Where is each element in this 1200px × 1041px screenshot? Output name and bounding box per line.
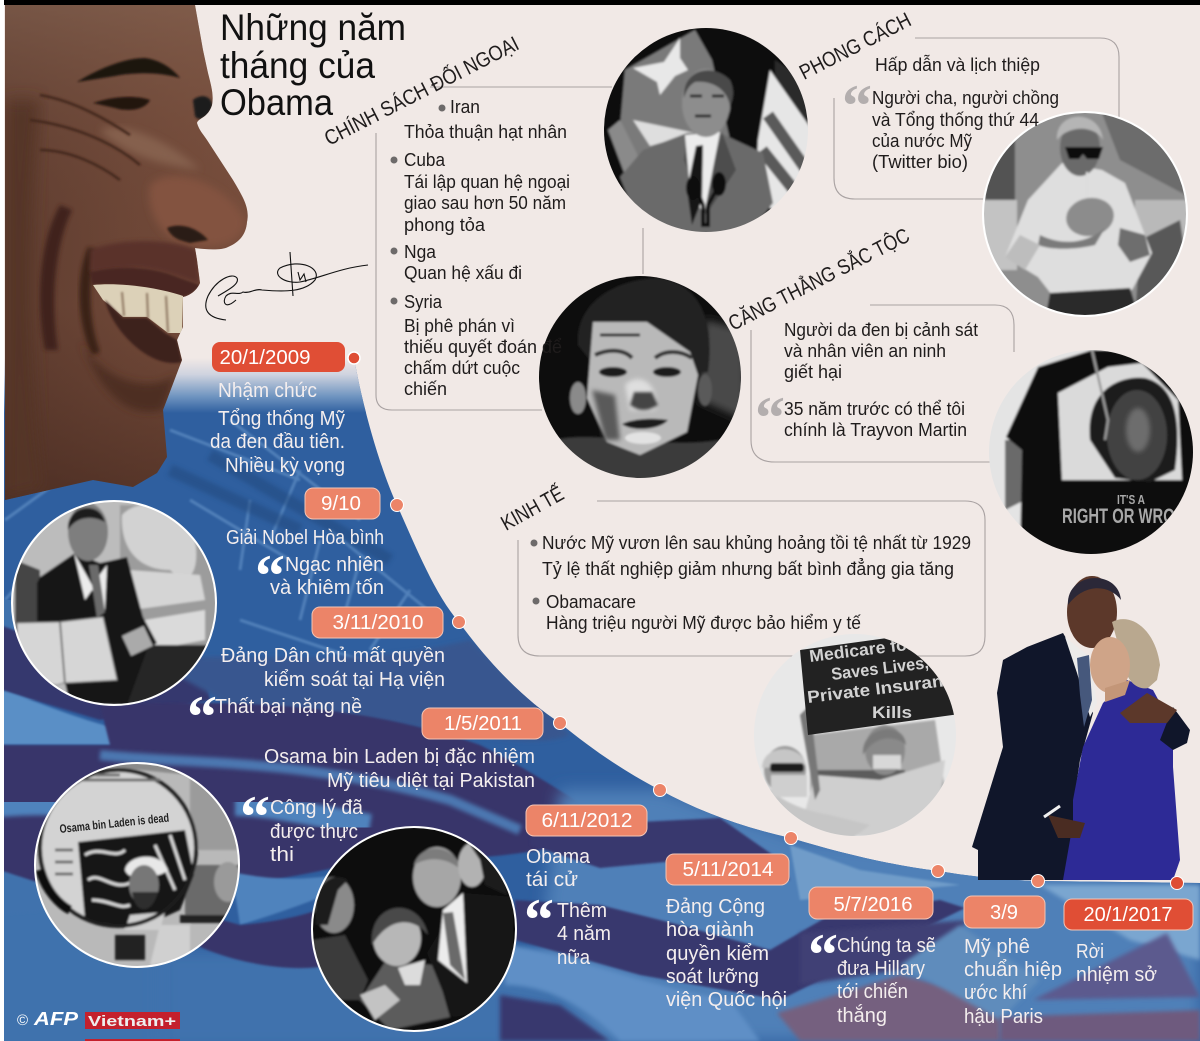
timeline item: 6/11/2012: [524, 784, 666, 969]
text block: foreign policy: giao sau hơn 50 năm: [404, 193, 566, 213]
timeline item: 3/9: ước khí: [964, 982, 1027, 1004]
timeline item: 3/9: 3/9: [990, 902, 1018, 924]
timeline item: 6/11/2012: Obama: [526, 846, 591, 868]
title: Những năm: [220, 7, 406, 48]
text block: economy: Hàng triệu người Mỹ được bảo hiểm y tế: [546, 613, 861, 633]
timeline item: 20/1/2009: da đen đầu tiên.: [210, 431, 345, 453]
heading: economy: KINH TẾ: [497, 482, 568, 535]
credits: AFP and Vietnam+: AFP: [33, 1009, 79, 1029]
timeline item: 6/11/2012: tái cử: [526, 869, 578, 891]
quote mark: “: [808, 922, 838, 988]
timeline item: 6/11/2012: 6/11/2012: [542, 810, 632, 832]
timeline item: 20/1/2009: Tổng thống Mỹ: [218, 408, 345, 430]
connector lines: [376, 38, 1119, 656]
timeline item: 1/5/2011: Mỹ tiêu diệt tại Pakistan: [327, 770, 535, 792]
text block: racial tension: và nhân viên an ninh: [784, 341, 946, 361]
timeline item: 20/1/2009: [210, 342, 360, 477]
text block: economy: Tỷ lệ thất nghiệp giảm nhưng bất bình đẳng gia tăng: [542, 558, 954, 579]
text block: foreign policy: thiếu quyết đoán để: [404, 337, 562, 357]
timeline item: 5/7/2016: thắng: [837, 1004, 887, 1027]
timeline item: 1/5/2011: [240, 708, 566, 866]
text block: racial tension: [755, 320, 978, 451]
timeline item: 20/1/2009: Nhiều kỳ vọng: [225, 455, 345, 477]
photo: Nobel prize: [10, 498, 220, 713]
text block: foreign policy: Syria: [404, 292, 443, 312]
timeline item: 1/5/2011: được thực: [270, 821, 358, 843]
timeline item: 3/11/2010: Thất bại nặng nề: [215, 696, 362, 718]
timeline item: 9/10: Ngạc nhiên: [285, 554, 384, 576]
timeline item: 5/11/2014: [666, 832, 798, 1011]
photo: Medicare protest: Medicare for: [808, 634, 915, 666]
timeline item: 3/9: Mỹ phê: [964, 936, 1030, 958]
photo: Medicare protest: Private Insuran: [806, 671, 944, 707]
text block: style: Người cha, người chồng: [872, 88, 1059, 108]
timeline item: 1/5/2011: Osama bin Laden bị đặc nhiệm: [264, 746, 535, 768]
quote mark: “: [755, 385, 785, 451]
photo: Obama family: [310, 825, 520, 1040]
photo: Trayvon Martin shirt: IT'S A: [1117, 492, 1145, 507]
timeline item: 3/9: [964, 874, 1062, 1028]
photo: newspaper bin Laden: [30, 760, 245, 970]
quote mark: “: [240, 784, 270, 850]
timeline item: 5/7/2016: tới chiến: [837, 981, 908, 1003]
text block: foreign policy: phong tỏa: [404, 215, 486, 235]
text block: foreign policy: Thỏa thuận hạt nhân: [404, 122, 567, 142]
heading: racial tension: CĂNG THẲNG SẮC TỘC: [724, 223, 913, 335]
timeline item: 5/7/2016: 5/7/2016: [834, 894, 912, 916]
text block: style: Hấp dẫn và lịch thiệp: [875, 54, 1040, 75]
text block: racial tension: Người da đen bị cảnh sát: [784, 320, 978, 340]
text block: economy: Obamacare: [546, 592, 636, 612]
photo frame: bin Laden: [35, 763, 239, 967]
title: [220, 7, 406, 123]
photo: newspaper bin Laden: Osama bin Laden is dead: [59, 811, 170, 836]
timeline item: 5/11/2014: 5/11/2014: [682, 859, 774, 881]
timeline item: 1/5/2011: Công lý đã: [270, 797, 364, 819]
text block: style: của nước Mỹ: [872, 131, 972, 151]
timeline item: 20/1/2017: [1064, 876, 1193, 986]
text block: style: và Tổng thống thứ 44: [872, 110, 1039, 130]
photo: Trayvon Martin shirt: [985, 345, 1200, 560]
heading: style: PHONG CÁCH: [796, 9, 915, 84]
text block: economy: Nước Mỹ vươn lên sau khủng hoảng tồi tệ nhất từ 1929: [542, 533, 971, 553]
text block: racial tension: 35 năm trước có thể tôi: [784, 399, 965, 419]
photo frame: Nobel: [12, 501, 216, 705]
timeline item: 5/11/2014: viện Quốc hội: [666, 989, 787, 1011]
text block: foreign policy: chấm dứt cuộc: [404, 358, 520, 378]
timeline item: 5/7/2016: [808, 864, 944, 1027]
text block: racial tension: giết hại: [784, 362, 842, 382]
text block: foreign policy: Quan hệ xấu đi: [404, 263, 522, 283]
quote mark: “: [187, 684, 217, 750]
text block: foreign policy: Iran: [450, 97, 480, 117]
timeline item: 20/1/2017: nhiệm sở: [1076, 964, 1157, 986]
credits: AFP and Vietnam+: [17, 1009, 180, 1041]
timeline item: 20/1/2017: 20/1/2017: [1084, 904, 1172, 926]
quote mark: “: [524, 887, 554, 953]
timeline item: 20/1/2009: 20/1/2009: [220, 347, 310, 369]
timeline item: 3/9: hậu Paris: [964, 1006, 1043, 1028]
timeline item: 3/11/2010: [187, 607, 466, 750]
timeline item: 5/7/2016: đưa Hillary: [837, 958, 925, 980]
timeline item: 3/11/2010: 3/11/2010: [332, 612, 424, 634]
timeline item: 5/11/2014: hòa giành: [666, 919, 754, 941]
timeline item: 5/11/2014: quyền kiểm: [666, 943, 769, 965]
photo: Obama at podium: [600, 25, 812, 235]
photo: Obama and Hillary Clinton: [972, 576, 1190, 880]
timeline item: 3/11/2010: Đảng Dân chủ mất quyền: [221, 645, 445, 667]
timeline item: 5/11/2014: soát lưỡng: [666, 966, 759, 988]
text block: foreign policy: [390, 97, 570, 399]
text block: racial tension: chính là Trayvon Martin: [784, 420, 967, 440]
text block: foreign policy: Tái lập quan hệ ngoại: [404, 172, 570, 192]
timeline item: 9/10: 9/10: [321, 493, 361, 515]
photo frame: coconut: [983, 112, 1187, 316]
quote mark: “: [842, 73, 872, 139]
timeline item: 9/10: [226, 488, 404, 609]
photo: Medicare protest: Saves Lives,: [830, 653, 930, 684]
timeline item: 6/11/2012: Thêm: [557, 900, 607, 922]
timeline item: 6/11/2012: 4 năm: [557, 923, 611, 945]
quote mark: “: [255, 543, 285, 609]
timeline item: 1/5/2011: thi: [270, 844, 294, 866]
portrait: Obama profile: [0, 0, 260, 510]
text block: foreign policy: chiến: [404, 379, 447, 399]
photo: Medicare protest: Kills: [872, 703, 912, 722]
timeline item: 9/10: và khiêm tốn: [270, 577, 384, 599]
timeline item: 5/7/2016: Chúng ta sẽ: [837, 935, 936, 957]
heading: foreign policy: CHÍNH SÁCH ĐỐI NGOẠI: [320, 31, 523, 150]
timeline item: 9/10: Giải Nobel Hòa bình: [226, 527, 384, 549]
timeline item: 6/11/2012: nữa: [557, 947, 591, 969]
title: tháng của: [220, 45, 375, 86]
photo: Syrian boy: [535, 272, 745, 482]
timeline sweep background: American flag: [0, 350, 1200, 1041]
photo frame: family: [312, 827, 516, 1031]
timeline item: 3/9: chuẩn hiệp: [964, 959, 1062, 981]
text block: foreign policy: Cuba: [404, 150, 446, 170]
signature: [206, 252, 368, 320]
credits: AFP and Vietnam+: Vietnam+: [88, 1013, 176, 1030]
left margin strip: [0, 0, 4, 1041]
timeline item: 1/5/2011: 1/5/2011: [444, 713, 522, 735]
text block: foreign policy: Nga: [404, 242, 437, 262]
top border: [0, 0, 1200, 5]
photo: Obama with coconut: [984, 113, 1186, 315]
timeline item: 5/11/2014: Đảng Cộng: [666, 896, 765, 918]
timeline item: 20/1/2017: Rời: [1076, 941, 1104, 963]
photo: Medicare protest: [750, 628, 960, 840]
credits: AFP and Vietnam+: ©: [17, 1012, 28, 1029]
text block: economy: [530, 533, 971, 633]
timeline item: 20/1/2009: Nhậm chức: [218, 380, 317, 402]
text block: style: (Twitter bio): [872, 152, 968, 172]
timeline item: 3/11/2010: kiểm soát tại Hạ viện: [264, 669, 445, 691]
title: Obama: [220, 82, 333, 123]
text block: style: [842, 54, 1059, 172]
text block: foreign policy: Bị phê phán vì: [404, 316, 515, 336]
